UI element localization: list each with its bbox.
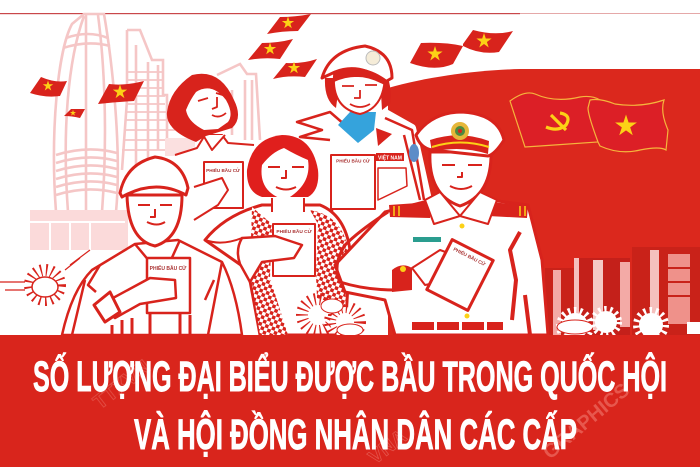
left sunflower (0, 250, 90, 300)
hair (167, 74, 238, 142)
ballot (204, 162, 243, 208)
ballot (273, 224, 315, 276)
right buildings (545, 247, 700, 335)
ballot (427, 240, 493, 310)
icon: badge (409, 144, 419, 162)
woman with short hair (167, 74, 262, 240)
icon: cap emblem (451, 122, 469, 140)
ballot: PHIẾU BẦU CỬ (452, 246, 487, 268)
worker figure (62, 157, 242, 335)
right sunflowers (557, 311, 663, 339)
arm folds (510, 232, 530, 335)
peaked cap (416, 112, 504, 156)
flag 4 (267, 14, 311, 34)
party and national flags (510, 93, 668, 152)
middle woman figure (205, 135, 350, 335)
soldier woman figure (297, 46, 428, 260)
title banner (0, 335, 700, 467)
flag 5 (248, 39, 293, 60)
small flags (30, 14, 513, 118)
flag 2 (64, 109, 85, 118)
epaulets (389, 202, 432, 218)
medal ribbon (413, 237, 441, 242)
tower base (30, 210, 128, 250)
buttons (460, 224, 470, 318)
belt (412, 322, 503, 330)
bottom-middle sunflowers (302, 299, 363, 337)
icon: hammer and sickle (546, 113, 568, 130)
national flag (588, 100, 668, 152)
flag 8 (463, 30, 513, 53)
flag 1 (30, 77, 67, 97)
police officer figure (335, 112, 548, 335)
top rule (0, 13, 700, 14)
face features (342, 85, 377, 107)
hair (247, 135, 318, 197)
hair side (325, 78, 391, 110)
beret (322, 46, 392, 82)
neck and scarf (338, 112, 376, 143)
tag: Viet Nam: VIỆT NAM (378, 154, 402, 162)
watermark: TTXVN (90, 356, 155, 414)
ballot: PHIẾU BẦU CỬ (276, 228, 312, 235)
hand and sleeve (100, 278, 176, 318)
ballot: PHIẾU BẦU CỬ (150, 265, 187, 272)
sleeve cuff (392, 265, 412, 292)
watermark: GRAPHICS (539, 379, 634, 464)
flag 6 (273, 59, 317, 79)
hand (412, 250, 462, 285)
rank insignia (376, 128, 392, 146)
ballot (331, 155, 375, 209)
patterned scarf (250, 207, 288, 335)
ballot (147, 258, 190, 313)
party flag (510, 93, 600, 147)
tag: Viet Nam (376, 153, 404, 162)
red background field (388, 69, 700, 340)
flag 7 (410, 43, 463, 68)
watermark (90, 356, 634, 467)
hand (194, 178, 228, 220)
hard hat (120, 157, 188, 197)
hand (238, 236, 302, 282)
skyline: tower and buildings (54, 14, 260, 212)
ballot: PHIẾU BẦU CỬ (206, 167, 240, 173)
face (430, 152, 491, 206)
flag 3 (98, 81, 144, 104)
ballot: PHIẾU BẦU CỬ (336, 158, 370, 164)
